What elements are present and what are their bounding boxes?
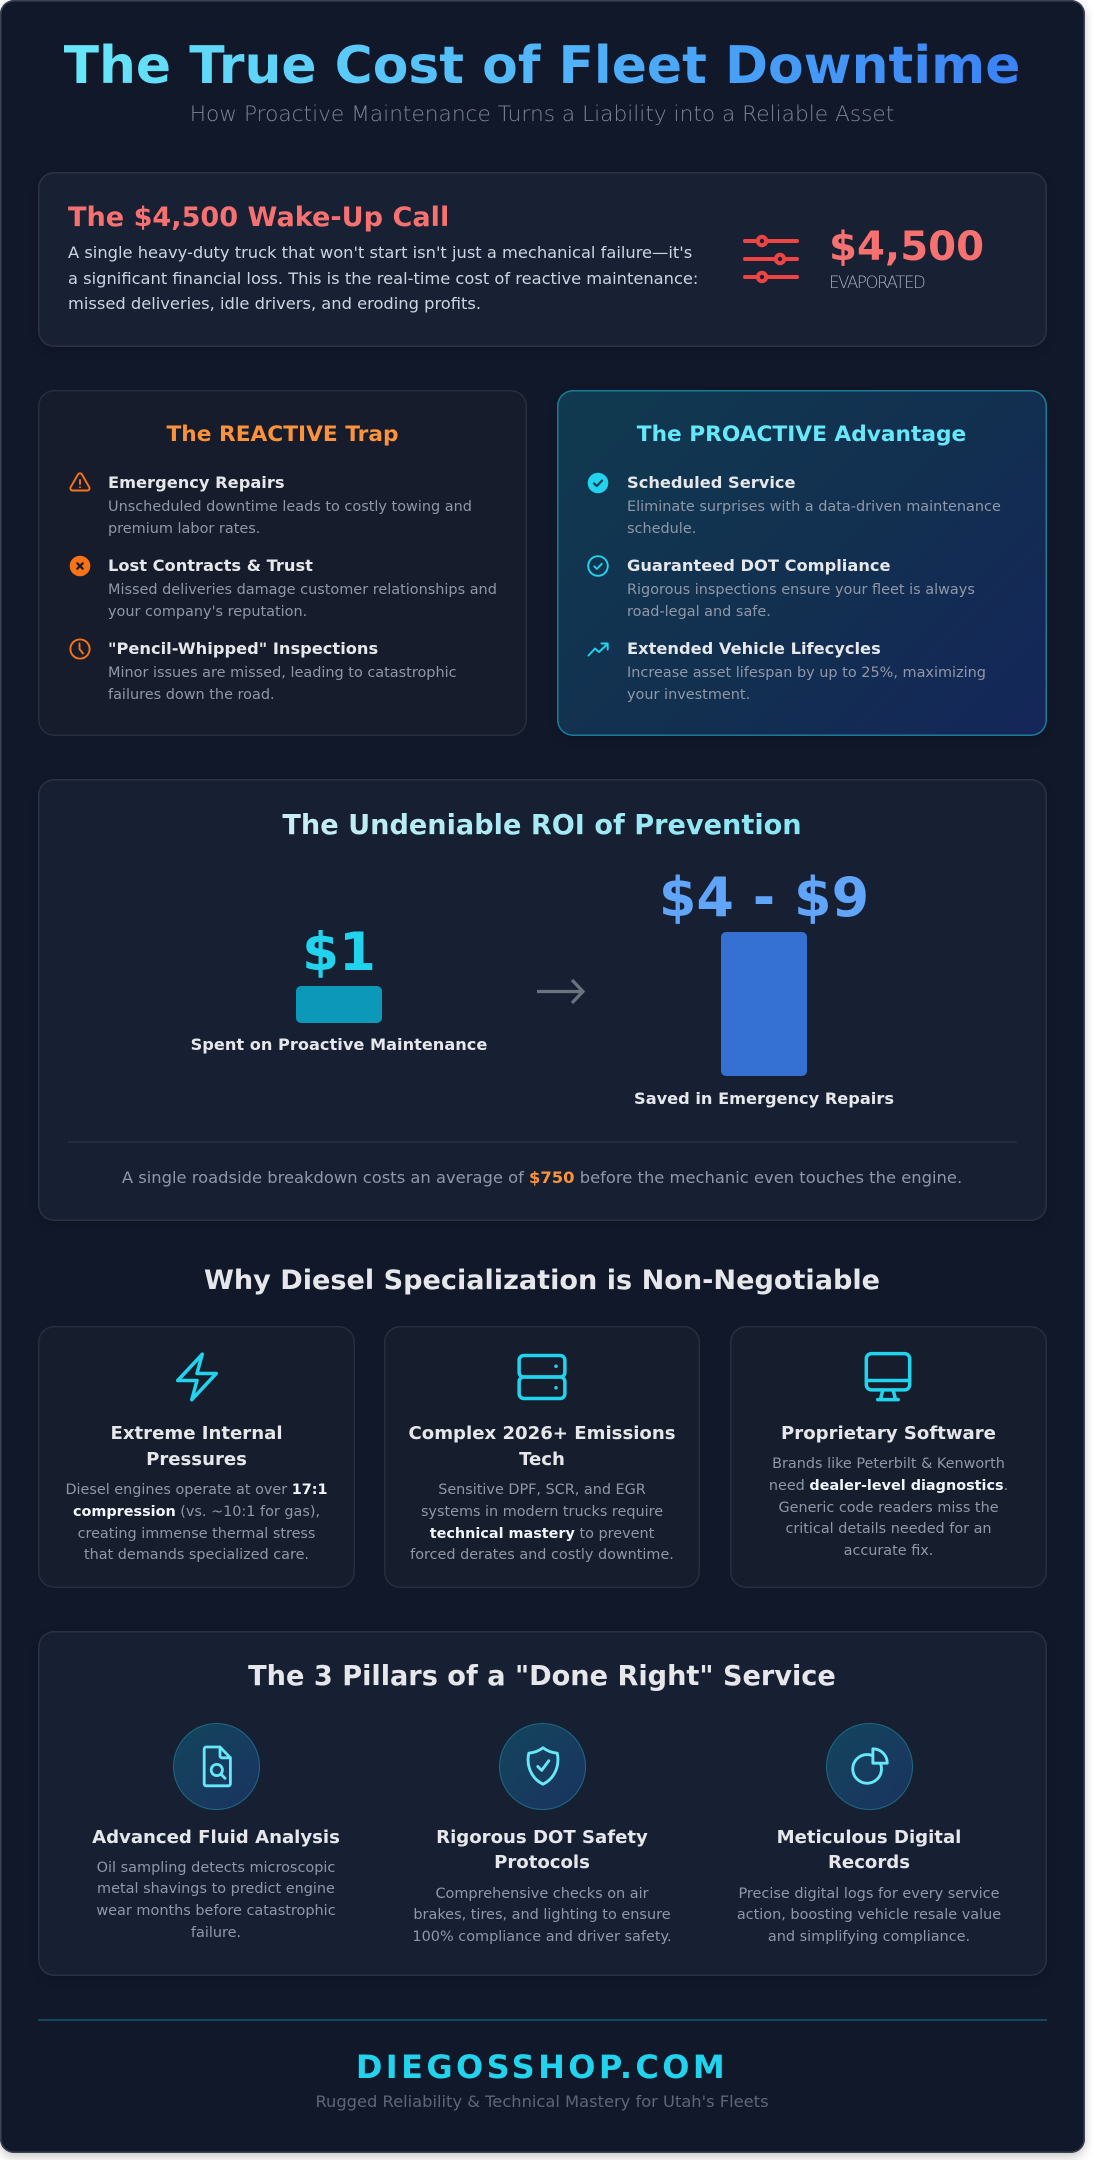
ROI heading: The Undeniable ROI of Prevention xyxy=(282,810,802,841)
card title xyxy=(408,1423,676,1470)
reactive heading: The REACTIVE Trap xyxy=(166,422,398,447)
wake-up text xyxy=(68,243,698,313)
item title: Extended Vehicle Lifecycles xyxy=(627,639,881,658)
card title xyxy=(110,1423,283,1470)
panel: ROI of prevention xyxy=(38,779,1047,1221)
evaporated label: EVAPORATED xyxy=(829,273,924,292)
wake-up text: missed deliveries, idle drivers, and eroding profits. xyxy=(68,294,481,313)
wake-up text: a significant financial loss. This is the real-time cost of reactive maintenance: xyxy=(68,269,698,288)
pillar title: Records xyxy=(828,1852,910,1872)
icon: pie chart xyxy=(826,1722,913,1810)
item description: Unscheduled downtime leads to costly towing and xyxy=(108,499,472,515)
wake-up heading: The $4,500 Wake-Up Call xyxy=(68,202,449,233)
pillar text: brakes, tires, and lighting to ensure xyxy=(413,1907,671,1923)
item description: schedule. xyxy=(627,521,696,537)
pillar title: Protocols xyxy=(494,1852,590,1872)
pillar text: failure. xyxy=(191,1925,241,1941)
pillar title: Rigorous DOT Safety xyxy=(436,1826,648,1848)
label: spent: Spent on Proactive Maintenance xyxy=(191,1035,487,1054)
card title: Extreme Internal xyxy=(110,1423,283,1444)
icon: filled check xyxy=(588,472,608,494)
item description: your investment. xyxy=(627,687,750,703)
card text: accurate fix. xyxy=(844,1543,933,1559)
pillar text: Oil sampling detects microscopic xyxy=(97,1860,335,1876)
arrow xyxy=(537,979,585,1004)
card text xyxy=(769,1456,1008,1559)
card text: that demands specialized care. xyxy=(84,1547,309,1563)
value: $1: $1 xyxy=(302,922,376,983)
bar: $1 xyxy=(296,986,382,1023)
item title: Emergency Repairs xyxy=(108,473,285,492)
card text: forced derates and costly downtime. xyxy=(410,1547,674,1563)
breakdown note: A single roadside breakdown costs an average of $750 before the mechanic even touches the engine. xyxy=(122,1168,962,1187)
card text: Generic code readers miss the xyxy=(778,1500,999,1516)
footer brand: DIEGOSSHOP.COM xyxy=(356,2048,728,2086)
pillar text xyxy=(96,1860,336,1941)
card text: technical mastery to prevent xyxy=(430,1526,654,1542)
icon: x circle xyxy=(70,556,90,576)
item description: Minor issues are missed, leading to catastrophic xyxy=(108,665,457,681)
panel: reactive trap xyxy=(38,390,527,736)
item description: failures down the road. xyxy=(108,687,275,703)
item description: Increase asset lifespan by up to 25%, maximizing xyxy=(627,665,986,681)
proactive heading: The PROACTIVE Advantage xyxy=(637,422,966,447)
pillar text: wear months before catastrophic xyxy=(96,1903,336,1919)
pillar text: metal shavings to predict engine xyxy=(97,1881,335,1897)
title: The True Cost of Fleet Downtime xyxy=(64,36,1020,96)
item description xyxy=(108,499,472,537)
card text xyxy=(410,1482,674,1563)
card: emissions tech xyxy=(384,1326,700,1588)
item description: Missed deliveries damage customer relationships and xyxy=(108,582,497,598)
icon: server xyxy=(517,1354,567,1400)
card title: Tech xyxy=(519,1449,565,1470)
icon: shield check xyxy=(499,1722,586,1810)
item description: your company's reputation. xyxy=(108,604,307,620)
pillar title: Advanced Fluid Analysis xyxy=(92,1826,340,1848)
icon: sliders xyxy=(743,234,799,284)
card text: compression (vs. ~10:1 for gas), xyxy=(73,1504,320,1520)
item title: Guaranteed DOT Compliance xyxy=(627,556,891,575)
bar: $4-$9 xyxy=(721,932,807,1076)
item description xyxy=(627,665,986,703)
pillar text: action, boosting vehicle resale value xyxy=(737,1907,1001,1923)
subtitle: How Proactive Maintenance Turns a Liability into a Reliable Asset xyxy=(190,102,894,127)
panel: wake-up call xyxy=(38,172,1047,347)
card title: Complex 2026+ Emissions xyxy=(408,1423,676,1444)
pillar text: Precise digital logs for every service xyxy=(738,1886,1000,1902)
item description xyxy=(627,499,1001,537)
card text: critical details needed for an xyxy=(785,1521,992,1537)
amount: $4,500 xyxy=(829,224,984,270)
icon: warning xyxy=(69,472,90,492)
card: proprietary software xyxy=(730,1326,1047,1588)
icon: bolt xyxy=(176,1352,218,1402)
card title: Proprietary Software xyxy=(781,1423,996,1444)
icon: trending up xyxy=(588,642,609,656)
pillar title: Meticulous Digital xyxy=(777,1826,961,1848)
icon: document search xyxy=(173,1722,260,1810)
pillar title xyxy=(777,1826,961,1872)
item title: Scheduled Service xyxy=(627,473,796,492)
card text: Diesel engines operate at over 17:1 xyxy=(65,1482,328,1498)
item description: Rigorous inspections ensure your fleet is always xyxy=(627,582,975,598)
label: saved: Saved in Emergency Repairs xyxy=(634,1089,894,1108)
item description xyxy=(108,582,497,620)
card text: Sensitive DPF, SCR, and EGR xyxy=(438,1482,646,1498)
card text: systems in modern trucks require xyxy=(421,1504,663,1520)
pillar title xyxy=(436,1826,648,1872)
card text: creating immense thermal stress xyxy=(78,1526,315,1542)
icon: monitor xyxy=(864,1352,912,1402)
icon: clock xyxy=(69,638,91,660)
pillars heading: The 3 Pillars of a "Done Right" Service xyxy=(248,1661,836,1692)
item title: "Pencil-Whipped" Inspections xyxy=(108,639,378,658)
pillar text xyxy=(737,1886,1001,1945)
card: extreme internal pressures xyxy=(38,1326,355,1588)
item description: Eliminate surprises with a data-driven maintenance xyxy=(627,499,1001,515)
footer tagline: Rugged Reliability & Technical Mastery for Utah's Fleets xyxy=(315,2092,769,2111)
panel: three pillars xyxy=(38,1631,1047,1976)
item title: Lost Contracts & Trust xyxy=(108,556,313,575)
item description xyxy=(108,665,457,703)
panel: proactive advantage xyxy=(557,390,1047,736)
card text: need dealer-level diagnostics. xyxy=(769,1478,1008,1494)
pillar text: Comprehensive checks on air xyxy=(435,1886,649,1902)
card title: Pressures xyxy=(146,1449,247,1470)
icon: outline check xyxy=(587,555,609,577)
item description: road-legal and safe. xyxy=(627,604,771,620)
item description xyxy=(627,582,975,620)
wake-up text: A single heavy-duty truck that won't start isn't just a mechanical failure—it's xyxy=(68,243,692,262)
card text: Brands like Peterbilt & Kenworth xyxy=(772,1456,1005,1472)
pillar text: and simplifying compliance. xyxy=(768,1929,970,1945)
section heading: diesel specialization: Why Diesel Specialization is Non-Negotiable xyxy=(204,1265,880,1296)
card text xyxy=(65,1482,328,1563)
value: $4-$9: $4 - $9 xyxy=(659,866,869,929)
item description: premium labor rates. xyxy=(108,521,260,537)
pillar text xyxy=(412,1886,672,1945)
pillar text: 100% compliance and driver safety. xyxy=(412,1929,672,1945)
